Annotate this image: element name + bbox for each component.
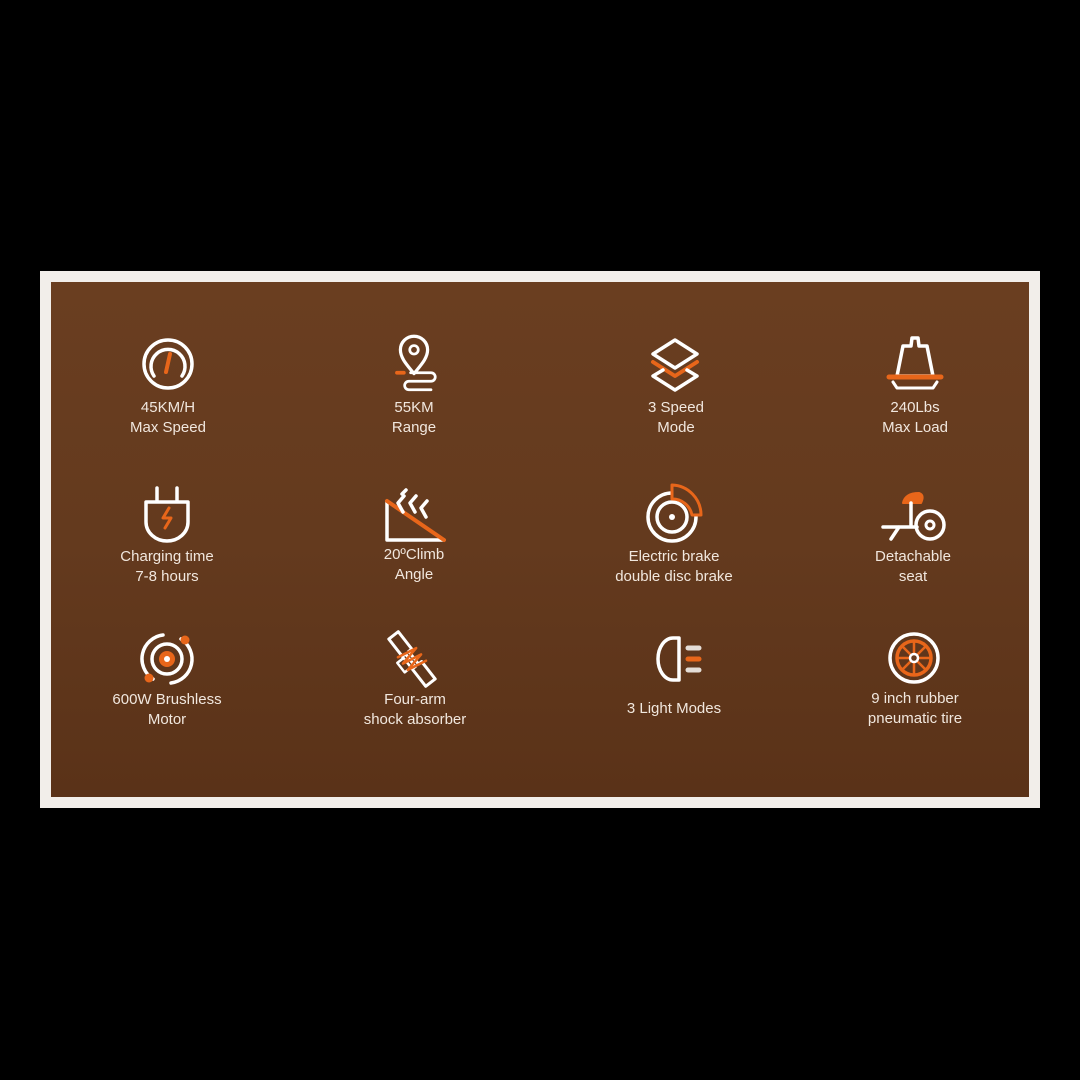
label: tire: pneumatic tire (868, 710, 962, 726)
label: tire (868, 690, 962, 726)
label: motor: 600W Brushless (112, 691, 222, 708)
label: speed mode: Mode (657, 418, 695, 436)
icon: motor (142, 635, 192, 683)
label: max load: 240Lbs (890, 399, 940, 416)
label: charging: Charging time (120, 548, 214, 565)
label: climb: Angle (395, 566, 433, 582)
label: seat: Detachable (875, 548, 951, 565)
label: charging (120, 548, 214, 584)
label: shock: Four-arm (384, 691, 446, 708)
icon: location pin (397, 336, 435, 390)
label: climb (384, 546, 444, 582)
label: brake: double disc brake (615, 568, 733, 584)
label: tire: 9 inch rubber (871, 690, 959, 707)
label: speed mode (648, 399, 704, 436)
label: shock (364, 691, 466, 728)
label: charging: 7-8 hours (135, 568, 199, 584)
label: motor: Motor (148, 710, 186, 728)
label: range: Range (392, 418, 436, 436)
label: range (392, 399, 436, 436)
label: climb: 20ºClimb (384, 546, 444, 563)
icon: headlight (658, 638, 699, 680)
label: light modes: 3 Light Modes (627, 700, 721, 717)
icon: wheel (890, 634, 938, 682)
frame (40, 271, 1040, 808)
icon: charging plug (146, 488, 188, 541)
label: max speed (130, 399, 206, 436)
label: shock: shock absorber (364, 710, 466, 728)
label: seat (875, 548, 951, 584)
icon: seat (883, 493, 944, 539)
label: max load: Max Load (882, 418, 948, 436)
label: speed mode: 3 Speed (648, 399, 704, 416)
icon: climb angle (387, 490, 444, 540)
icon: weight load (889, 338, 941, 388)
panel: specs background (51, 282, 1029, 797)
icon: layers (653, 340, 697, 390)
icon: speedometer (144, 340, 192, 388)
label: max speed: 45KM/H (141, 399, 195, 416)
icon: shock absorber (382, 629, 438, 691)
label: motor (112, 691, 222, 728)
label: seat: seat (899, 568, 927, 584)
label: max speed: Max Speed (130, 418, 206, 436)
label: brake (615, 548, 733, 584)
label: max load (882, 399, 948, 436)
icon: disc brake (648, 485, 701, 541)
label: range: 55KM (394, 399, 434, 416)
label: brake: Electric brake (629, 548, 719, 565)
